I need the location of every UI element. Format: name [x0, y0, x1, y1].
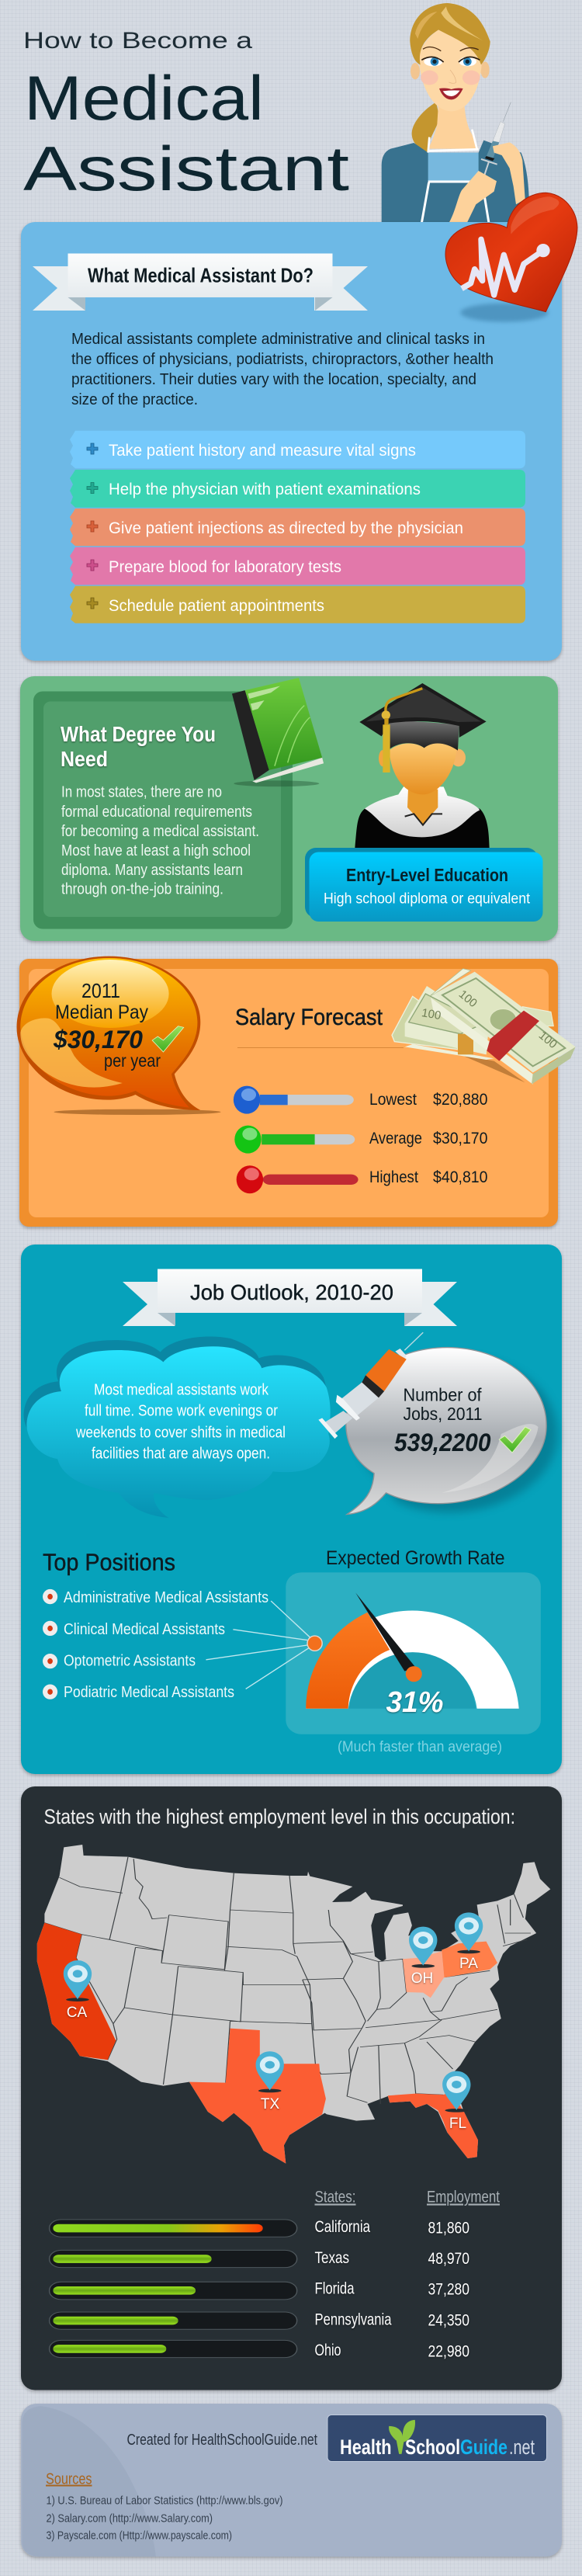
- description text: practitioners. Their duties vary with the location, specialty, and: [71, 371, 476, 388]
- duty 2: Help the physician with patient examinations: [109, 481, 421, 498]
- table: states and employment: California: [315, 2218, 370, 2236]
- panel: what medical assistant do: [21, 222, 562, 661]
- gauge chart: 31 percent: [206, 1572, 541, 1755]
- speech bubble: median pay: per year: [104, 1050, 161, 1071]
- title: [23, 28, 349, 204]
- gauge chart: 31 percent: (Much faster than average): [338, 1739, 502, 1755]
- logo: HealthSchoolGuide.net: .net: [509, 2435, 535, 2459]
- description text: Medical assistants complete administrative and clinical tasks in: [71, 331, 485, 348]
- sources list: 2) Salary.com (http://www.Salary.com): [47, 2512, 213, 2525]
- logo: HealthSchoolGuide.net: Health: [340, 2435, 391, 2459]
- heading: Need: [61, 747, 108, 771]
- text card: [43, 702, 281, 917]
- duty 4: Prepare blood for laboratory tests: [109, 558, 341, 576]
- icon: green book: [232, 678, 324, 786]
- icon: syringe: [318, 1332, 423, 1439]
- duty 3: [70, 509, 525, 546]
- table: states and employment: 24,350: [428, 2312, 469, 2329]
- table: states and employment: 22,980: [428, 2343, 469, 2360]
- list: top positions: Podiatric Medical Assistants: [64, 1684, 234, 1701]
- list: top positions: Clinical Medical Assistants: [64, 1621, 225, 1638]
- thermometer: lowest: Lowest: [369, 1091, 417, 1109]
- speech bubble: number of jobs: Jobs, 2011: [404, 1404, 483, 1424]
- ribbon heading: [123, 1269, 457, 1326]
- divider line: [237, 1047, 404, 1048]
- heading: top positions: Top Positions: [43, 1548, 175, 1576]
- panel background: [21, 2404, 562, 2557]
- title line: How to Become a: How to Become a: [23, 28, 252, 54]
- speech bubble: median pay: 2011: [81, 979, 120, 1002]
- icon: graduate: [355, 683, 490, 849]
- logo: HealthSchoolGuide.net: Guide: [460, 2435, 508, 2459]
- pin: Pennsylvania: [455, 1912, 483, 1953]
- thermometer: lowest: $20,880: [433, 1091, 487, 1109]
- paragraph: formal educational requirements: [61, 804, 252, 821]
- credit text: Created for HealthSchoolGuide.net: [127, 2432, 317, 2449]
- title line: Assistant: Assistant: [23, 134, 349, 204]
- gauge chart: 31 percent: 31%: [386, 1686, 444, 1719]
- table headers: [315, 2188, 500, 2206]
- icon: stack of money: 100: [421, 1006, 442, 1022]
- state: Texas: [189, 2029, 326, 2164]
- paragraph: for becoming a medical assistant.: [61, 823, 259, 840]
- list: top positions: Administrative Medical Assistants: [64, 1589, 268, 1606]
- state: California: [37, 1923, 116, 2060]
- speech bubble: number of jobs: 539,2200: [394, 1429, 491, 1456]
- pin: Florida: [442, 2071, 470, 2113]
- panel background: [21, 1786, 562, 2390]
- cloud with work hours text: weekends to cover shifts in medical: [75, 1424, 286, 1441]
- panel: footer: [21, 2404, 562, 2557]
- paragraph: through on-the-job training.: [61, 880, 223, 897]
- ribbon heading: Job Outlook, 2010-20: [190, 1280, 393, 1304]
- speech bubble: number of jobs: [346, 1348, 557, 1514]
- pin: Texas: [256, 2051, 284, 2092]
- cloud with work hours text: Most medical assistants work: [94, 1382, 269, 1399]
- dark inner frame: [33, 691, 293, 929]
- table: states and employment: 81,860: [428, 2219, 469, 2238]
- list: top positions: Optometric Assistants: [64, 1652, 196, 1669]
- table: states and employment: [315, 2218, 469, 2360]
- logo: HealthSchoolGuide.net: School: [405, 2435, 460, 2459]
- state labels: [67, 1956, 478, 2132]
- logo: HealthSchoolGuide.net: [327, 2415, 546, 2461]
- panel frame: [19, 959, 558, 1227]
- illustration: nurse with syringe: [382, 3, 529, 223]
- callout: entry-level education: High school diploma or equivalent: [324, 891, 531, 907]
- paragraph: In most states, there are no: [61, 784, 222, 801]
- panel: what degree you need: [20, 676, 558, 941]
- pin: Ohio: [409, 1927, 437, 1968]
- table headers: States:: [315, 2188, 355, 2206]
- speech bubble: median pay: Median Pay: [55, 1002, 148, 1023]
- duty 5: [70, 586, 525, 623]
- thermometer: highest: $40,810: [433, 1168, 487, 1186]
- panel background: [21, 1245, 562, 1774]
- panel background: [20, 676, 558, 941]
- state labels: OH: [411, 1970, 433, 1987]
- table headers: Employment: [427, 2188, 500, 2206]
- sources list: 3) Payscale.com (Http://www.payscale.com): [47, 2529, 232, 2542]
- paragraph: diploma. Many assistants learn: [61, 862, 243, 879]
- table: states and employment: 48,970: [428, 2250, 469, 2268]
- panel: job outlook: [21, 1245, 562, 1774]
- icon: stack of money: 100: [536, 1029, 559, 1051]
- description text: size of the practice.: [71, 391, 198, 408]
- cloud with work hours text: [24, 1336, 331, 1518]
- thermometer: highest: Highest: [369, 1168, 418, 1186]
- sources heading: Sources: [46, 2470, 92, 2487]
- map of the United States: [37, 1845, 550, 2164]
- state labels: FL: [449, 2116, 466, 2132]
- duty 1: [70, 431, 525, 468]
- duty 3: Give patient injections as directed by the physician: [109, 519, 463, 537]
- cloud with work hours text: full time. Some work evenings or: [85, 1402, 278, 1419]
- state: Ohio: [403, 1951, 445, 1998]
- sources list: 1) U.S. Bureau of Labor Statistics (http://www.bls.gov): [47, 2494, 282, 2508]
- table: states and employment: Pennsylvania: [315, 2310, 392, 2329]
- pin: California: [64, 1960, 92, 2001]
- duty 4: [70, 547, 525, 585]
- ribbon heading: [33, 253, 368, 311]
- bar chart: employment by state: [50, 2220, 297, 2358]
- panel: salary forecast: [17, 956, 576, 1227]
- state labels: PA: [459, 1956, 478, 1972]
- duty list: [70, 431, 525, 623]
- paragraph: Most have at least a high school: [61, 842, 251, 859]
- speech bubble: median pay: [17, 956, 221, 1115]
- state: Florida: [388, 2091, 478, 2158]
- state: Pennsylvania: [442, 1942, 497, 1977]
- table: states and employment: Texas: [315, 2249, 349, 2267]
- description text: the offices of physicians, podiatrists, chiropractors, &other health: [71, 351, 494, 368]
- ribbon heading: What Medical Assistant Do?: [88, 264, 314, 287]
- icon: stack of money: 100: [456, 988, 480, 1010]
- table: states and employment: 37,280: [428, 2281, 469, 2298]
- panel: state employment: [21, 1786, 562, 2390]
- callout: entry-level education: [305, 848, 543, 922]
- footer swoosh: [23, 2406, 156, 2557]
- thermometer: highest: [237, 1165, 487, 1193]
- state labels: CA: [67, 2005, 88, 2021]
- icon: heart with ECG line: [445, 193, 577, 322]
- heading: salary forecast: Salary Forecast: [235, 1005, 383, 1030]
- list: top positions: [43, 1589, 268, 1701]
- callout: entry-level education: Entry-Level Education: [346, 865, 508, 885]
- panel inner: [29, 969, 549, 1217]
- speech bubble: median pay: $30,170: [53, 1026, 143, 1054]
- heading: expected growth rate: Expected Growth Rate: [326, 1547, 504, 1569]
- table: states and employment: Florida: [315, 2279, 355, 2298]
- duty 1: Take patient history and measure vital signs: [109, 442, 416, 460]
- duty 2: [70, 470, 525, 508]
- duty 5: Schedule patient appointments: [109, 597, 324, 615]
- state lines: [44, 1857, 531, 2104]
- thermometer: average: $30,170: [433, 1130, 487, 1147]
- icon: stack of money: [392, 969, 576, 1085]
- sources list: [47, 2494, 282, 2542]
- thermometer: lowest: [234, 1086, 487, 1114]
- description text: [71, 331, 494, 408]
- title line: Medical: Medical: [24, 64, 264, 134]
- thermometer: average: [234, 1126, 487, 1154]
- paragraph: [61, 784, 259, 897]
- thermometer: average: Average: [369, 1130, 422, 1147]
- heading: States with the highest employment level in this occupation:: [43, 1805, 515, 1828]
- heading: [61, 722, 216, 771]
- table: states and employment: Ohio: [315, 2342, 341, 2359]
- map land: [37, 1845, 550, 2164]
- panel background: [21, 222, 562, 661]
- speech bubble: number of jobs: Number of: [404, 1385, 482, 1405]
- cloud with work hours text: facilities that are always open.: [92, 1446, 270, 1463]
- heading: What Degree You: [61, 722, 216, 746]
- state labels: TX: [261, 2096, 279, 2113]
